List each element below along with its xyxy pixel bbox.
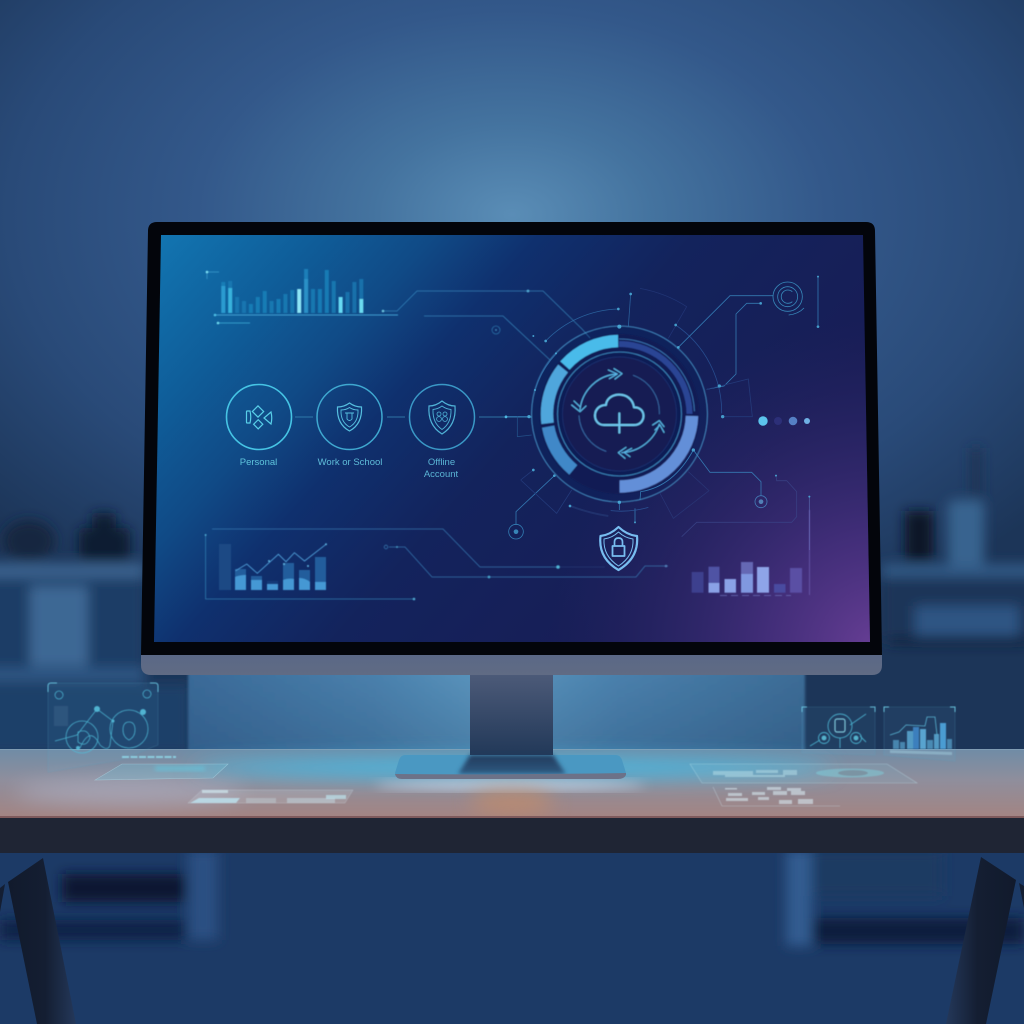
spiral copyright icon xyxy=(773,282,804,315)
hologram desk card: left xyxy=(95,764,228,780)
monitor screen xyxy=(154,235,870,642)
option: Work or School: Work or School xyxy=(318,457,382,468)
chart: lower right bars xyxy=(692,510,810,596)
option: Personal xyxy=(226,384,292,468)
target node left xyxy=(509,524,523,539)
circuit lines: upper left xyxy=(382,290,590,360)
left table leg xyxy=(0,858,76,1024)
status dots xyxy=(758,416,810,426)
desk front edge xyxy=(0,818,1024,853)
option: Offline Account: Account xyxy=(424,469,459,480)
circuit lines: lower center xyxy=(212,529,668,578)
floating hologram panel: right network xyxy=(802,707,875,755)
circuit lines around dial xyxy=(505,276,819,550)
cloud sync dial xyxy=(516,311,723,517)
hologram desk card: left lower xyxy=(188,790,353,803)
account options xyxy=(226,384,532,480)
target node left core xyxy=(514,529,518,534)
floating hologram panel: left xyxy=(48,683,176,772)
monitor chin xyxy=(141,652,882,675)
option: Offline Account: Offline xyxy=(428,457,455,468)
light under monitor xyxy=(188,672,805,752)
option: Personal: Personal xyxy=(240,457,277,468)
target node right core xyxy=(759,499,763,504)
chart: lower left bars with line xyxy=(205,534,415,600)
floating hologram panel: right bars xyxy=(884,707,955,761)
hologram desk card: right lower xyxy=(713,787,840,806)
background shelves, left xyxy=(0,513,190,754)
option: Work or School xyxy=(317,384,382,468)
monitor bezel xyxy=(141,222,882,655)
sync arrows and cloud icon xyxy=(572,369,664,458)
desk surface xyxy=(0,749,1024,818)
monitor stand base xyxy=(395,755,626,779)
thick ring segments xyxy=(516,311,723,517)
monitor stand neck xyxy=(470,675,553,757)
background shelves, right xyxy=(882,448,1024,644)
monitor xyxy=(141,222,882,675)
hologram desk card: right upper xyxy=(690,764,917,783)
icon: shield with padlock xyxy=(600,527,637,570)
bar chart: top left xyxy=(206,269,398,324)
thin dark ring segments xyxy=(518,313,721,515)
floor and lower furniture xyxy=(0,850,1024,1024)
target node right xyxy=(755,496,767,508)
option: Offline Account xyxy=(410,384,474,480)
right table leg xyxy=(946,857,1024,1024)
